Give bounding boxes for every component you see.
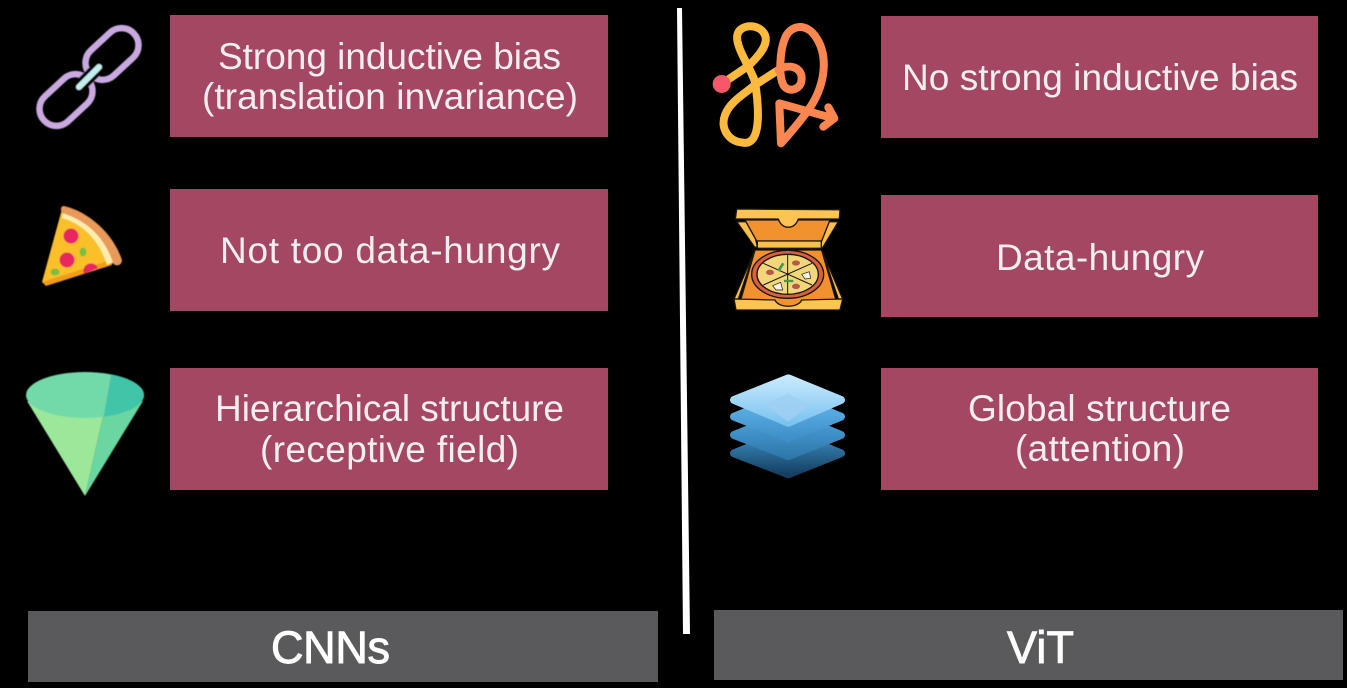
panel: no strong inductive bias: [881, 16, 1318, 138]
heading: ViT: ViT: [1007, 622, 1074, 673]
icon: pizza slice: [42, 206, 122, 286]
panel: hierarchical structure: [170, 368, 608, 490]
icon: chain link: [32, 21, 146, 133]
panel: strong inductive bias: (translation invariance): [202, 76, 578, 117]
panel: hierarchical structure: Hierarchical structure: [215, 388, 564, 429]
icon: cone: [26, 370, 150, 496]
panel: data-hungry: Data-hungry: [996, 237, 1204, 278]
heading: CNNs: CNNs: [271, 622, 390, 673]
icon: tangled path arrow: [713, 26, 834, 143]
panel: not too data-hungry: [170, 189, 608, 311]
panel: strong inductive bias: [170, 15, 608, 137]
divider line: [677, 8, 690, 634]
panel: global structure: (attention): [1015, 428, 1185, 469]
panel: no strong inductive bias: No strong inductive bias: [902, 57, 1298, 98]
icon: stacked layers: [734, 378, 841, 474]
heading: CNNs: [28, 611, 658, 682]
panel: data-hungry: [881, 195, 1318, 317]
panel: global structure: [881, 368, 1318, 490]
panel: not too data-hungry: Not too data-hungry: [220, 230, 560, 271]
panel: hierarchical structure: (receptive field): [260, 429, 519, 470]
panel: global structure: Global structure: [968, 388, 1231, 429]
heading: ViT: [714, 610, 1343, 680]
panel: strong inductive bias: Strong inductive bias: [218, 36, 561, 77]
icon: pizza box: [734, 209, 843, 310]
